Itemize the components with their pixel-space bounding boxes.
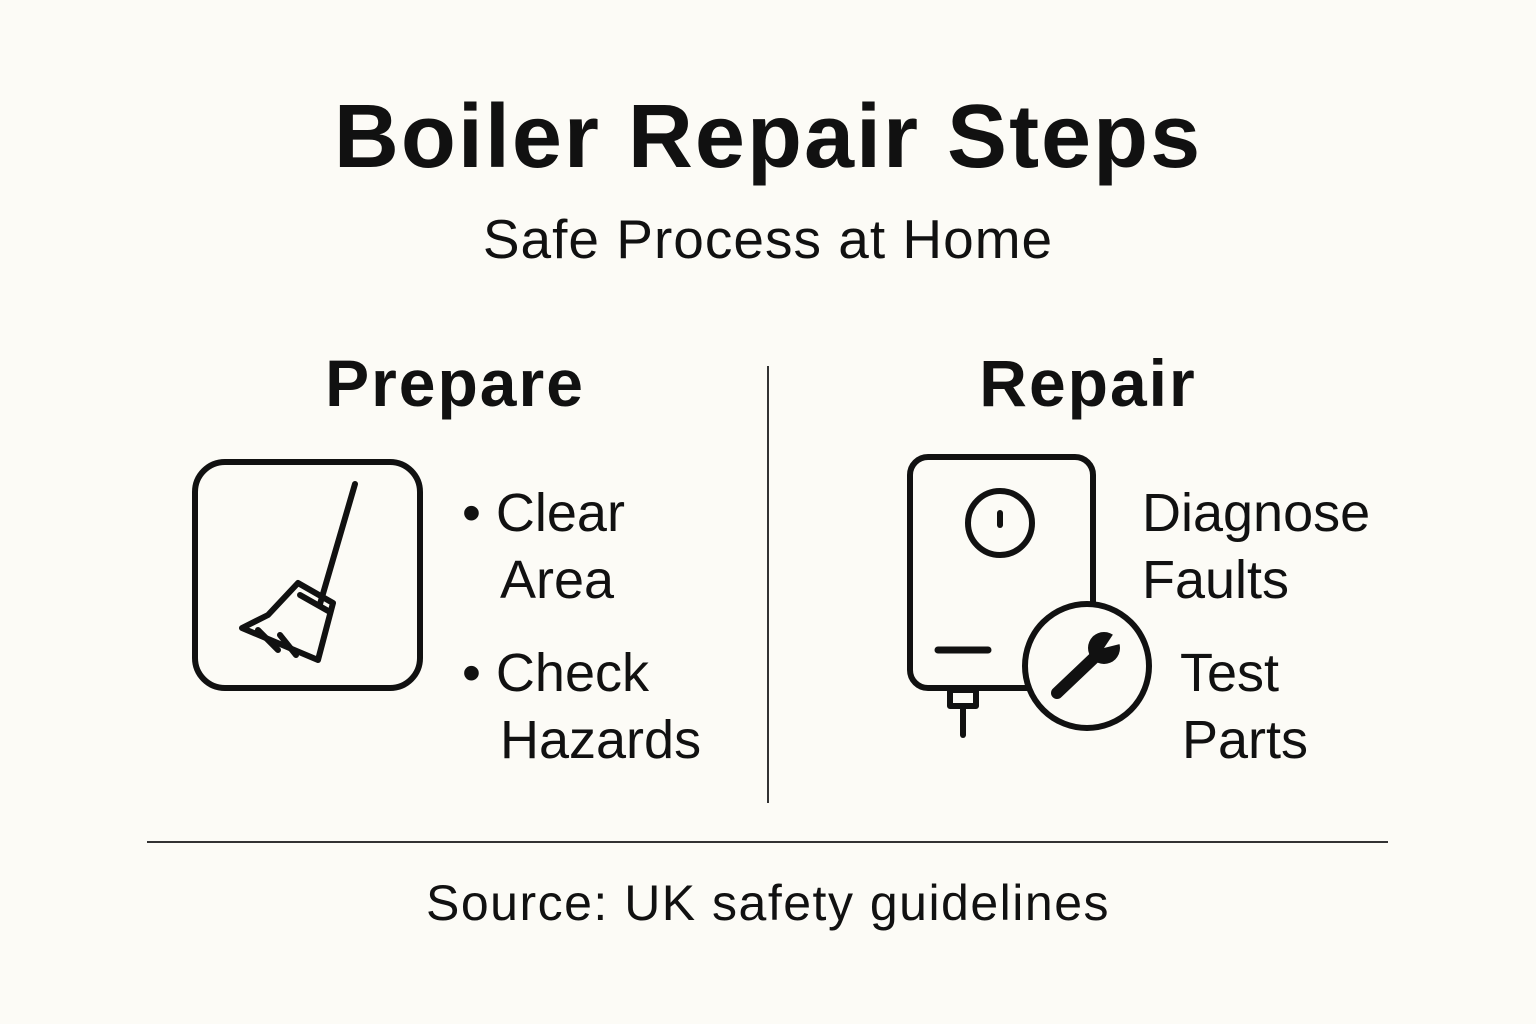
heading: repair: Repair bbox=[979, 346, 1197, 420]
list: prepare: • Check bbox=[462, 643, 649, 703]
list: prepare: Hazards bbox=[500, 710, 701, 770]
title: Boiler Repair Steps bbox=[334, 87, 1202, 187]
list: repair bbox=[1142, 483, 1370, 770]
list: repair: Diagnose bbox=[1142, 483, 1370, 543]
icon: boiler with wrench bbox=[910, 457, 1149, 735]
list: prepare bbox=[462, 483, 701, 770]
list: prepare: • Clear bbox=[462, 483, 625, 543]
list: repair: Faults bbox=[1142, 550, 1289, 610]
subtitle: Safe Process at Home bbox=[483, 208, 1053, 270]
list: repair: Parts bbox=[1182, 710, 1308, 770]
list: prepare: Area bbox=[500, 550, 614, 610]
source: Source: UK safety guidelines bbox=[426, 875, 1110, 931]
heading: prepare: Prepare bbox=[325, 346, 585, 420]
icon: broom bbox=[195, 462, 420, 688]
list: repair: Test bbox=[1180, 643, 1279, 703]
